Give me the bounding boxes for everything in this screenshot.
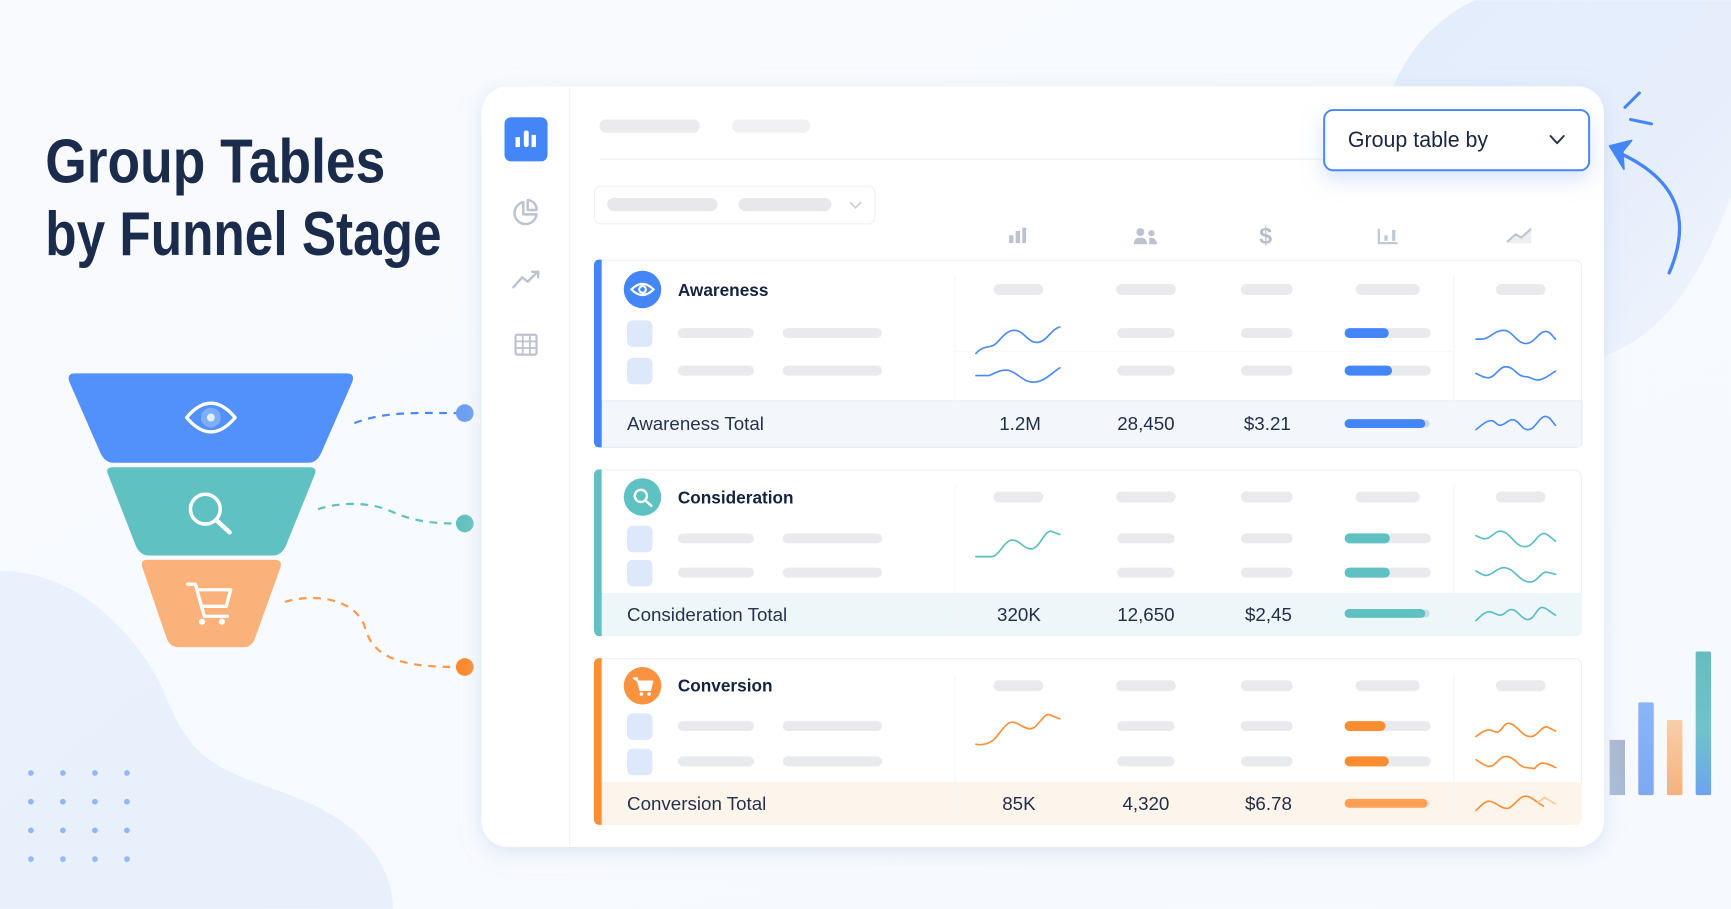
group heading: Conversion: [678, 675, 773, 695]
total row: $6.78: [1245, 793, 1292, 814]
total row: [627, 793, 1292, 814]
total row: Awareness Total: [627, 413, 764, 434]
column icon: dollar: $: [1259, 223, 1272, 249]
total row: $3.21: [1244, 413, 1291, 434]
sparklines: [976, 531, 1555, 621]
row placeholders: [627, 284, 1546, 384]
total row: [627, 413, 1291, 434]
background blob top right: [1393, 0, 1731, 366]
sidebar icon: line chart: [513, 272, 538, 287]
row placeholders: [627, 491, 1546, 586]
connector: awareness: [354, 404, 474, 423]
panel: awareness group: [594, 260, 1582, 447]
total row: 12,650: [1117, 604, 1175, 625]
panel: dashboard card: [481, 80, 1604, 847]
connector: consideration: [318, 504, 474, 532]
dropdown: group table by: [1324, 110, 1589, 170]
dropdown: group table by: Group table by: [1348, 127, 1488, 152]
title: [45, 127, 442, 269]
row placeholders: [627, 680, 1546, 775]
column icon: trend area: [1507, 229, 1531, 243]
funnel stage: conversion: [142, 560, 281, 647]
total row: Conversion Total: [627, 793, 766, 814]
connector: conversion: [285, 598, 474, 676]
funnel stage: awareness: [69, 373, 353, 463]
sparkle ticks: [1625, 93, 1652, 124]
title: Group Tables: [45, 127, 385, 196]
panel: conversion group: [594, 658, 1582, 825]
total row: 320K: [997, 604, 1041, 625]
sparklines: [976, 714, 1555, 811]
sparklines: [976, 327, 1555, 430]
column header icons: [1009, 223, 1531, 249]
total row: $2,45: [1245, 604, 1292, 625]
total row: Consideration Total: [627, 604, 787, 625]
panel: consideration group: [594, 469, 1582, 636]
arrow pointing to dropdown: [1610, 140, 1680, 273]
group icon: eye: [624, 271, 661, 308]
group icon: magnifier: [624, 478, 661, 516]
total row: [627, 604, 1292, 625]
filter box: [594, 186, 875, 224]
top placeholder bars: [599, 119, 1325, 159]
background blob bottom left: [0, 571, 393, 909]
progress bars: [1345, 721, 1431, 808]
total row: 4,320: [1122, 793, 1169, 814]
total row: 28,450: [1117, 413, 1175, 434]
sidebar icon: pie chart: [515, 200, 537, 224]
column icon: bars: [1009, 228, 1026, 243]
sidebar icon: bar chart active: [505, 117, 548, 161]
funnel: [69, 373, 353, 647]
group icon: cart: [624, 667, 661, 705]
column icon: bar baseline: [1379, 229, 1398, 243]
progress bars: [1345, 533, 1431, 618]
dot grid: [28, 770, 130, 862]
column icon: people: [1134, 228, 1157, 244]
progress bars: [1345, 328, 1431, 428]
title: by Funnel Stage: [45, 200, 442, 269]
funnel stage: consideration: [107, 467, 316, 556]
mini bar chart: [1610, 652, 1711, 795]
sidebar icon: table grid: [516, 335, 537, 355]
group heading: Awareness: [678, 280, 768, 300]
total row: 1.2M: [999, 413, 1041, 434]
group heading: Consideration: [678, 488, 794, 508]
total row: 85K: [1002, 793, 1036, 814]
